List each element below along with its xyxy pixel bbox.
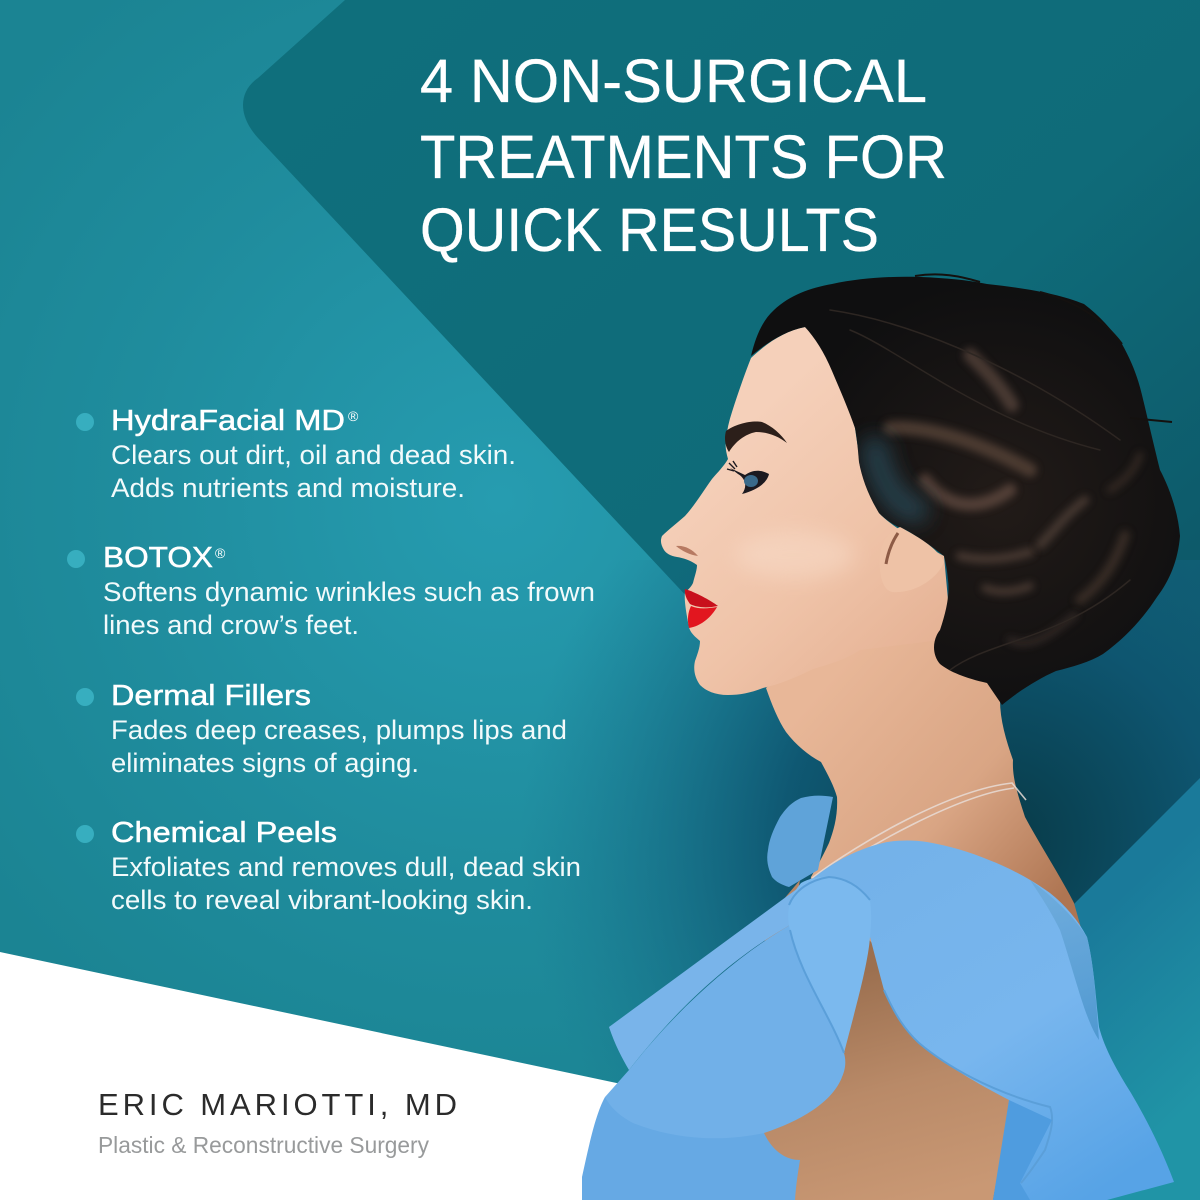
treatment: BOTOX xyxy=(67,542,595,640)
treatment: BOTOX: BOTOX xyxy=(103,542,213,574)
lips xyxy=(685,589,718,628)
shoulder sleeve xyxy=(811,840,1174,1200)
treatment: BOTOX: Softens dynamic wrinkles such as frown xyxy=(103,577,595,607)
blue right-of-arm shadow xyxy=(993,1100,1052,1200)
treatment: Dermal Fillers: Dermal Fillers xyxy=(111,680,311,712)
treatment: Dermal Fillers xyxy=(76,680,567,778)
portrait of woman in profile xyxy=(582,274,1180,1200)
ear xyxy=(880,527,944,592)
cheek highlight xyxy=(735,531,855,579)
sleeve under fold xyxy=(788,877,871,1053)
treatment: Chemical Peels xyxy=(76,817,581,915)
dark angled panel xyxy=(243,0,1200,900)
logo: Plastic & Reconstructive Surgery xyxy=(98,1132,429,1158)
eye xyxy=(727,461,769,494)
treatment: BOTOX: lines and crow’s feet. xyxy=(103,610,359,640)
title xyxy=(420,47,947,264)
title: QUICK RESULTS xyxy=(420,196,879,264)
white corner panel xyxy=(0,952,640,1200)
treatment: HydraFacial MD: Adds nutrients and moisture. xyxy=(111,473,465,503)
dress back ruffle xyxy=(767,796,833,887)
treatment: HydraFacial MD: HydraFacial MD xyxy=(111,405,345,437)
treatment: BOTOX: ® xyxy=(215,545,226,561)
logo: ERIC MARIOTTI, MD xyxy=(98,1087,457,1122)
treatment: Dermal Fillers: eliminates signs of aging. xyxy=(111,748,419,778)
logo xyxy=(98,1087,457,1158)
sleeve back shading xyxy=(1030,880,1099,1040)
face xyxy=(661,327,948,695)
necklace xyxy=(812,783,1026,880)
brow xyxy=(725,421,787,452)
treatment: HydraFacial MD: Clears out dirt, oil and dead skin. xyxy=(111,440,516,470)
lighter corner xyxy=(1040,778,1200,1200)
treatment: Dermal Fillers: Fades deep creases, plumps lips and xyxy=(111,715,567,745)
nostril xyxy=(676,546,698,556)
sheer bodice strip xyxy=(609,883,805,1070)
upper arm xyxy=(745,930,1012,1200)
treatment: Chemical Peels: Exfoliates and removes dull, dead skin xyxy=(111,852,581,882)
neck and shoulder xyxy=(766,590,1090,960)
treatment: Chemical Peels: Chemical Peels xyxy=(111,817,337,849)
fold edges xyxy=(789,877,1052,1183)
chest skin gap xyxy=(745,880,800,945)
treatment: HydraFacial MD xyxy=(76,405,516,503)
treatment: HydraFacial MD: ® xyxy=(348,408,359,424)
treatment: Chemical Peels: cells to reveal vibrant-looking skin. xyxy=(111,885,533,915)
front ruffle xyxy=(605,925,845,1138)
lower dress body xyxy=(582,1097,800,1200)
hair xyxy=(751,274,1180,705)
title: 4 NON-SURGICAL xyxy=(420,47,927,115)
title: TREATMENTS FOR xyxy=(420,123,947,191)
